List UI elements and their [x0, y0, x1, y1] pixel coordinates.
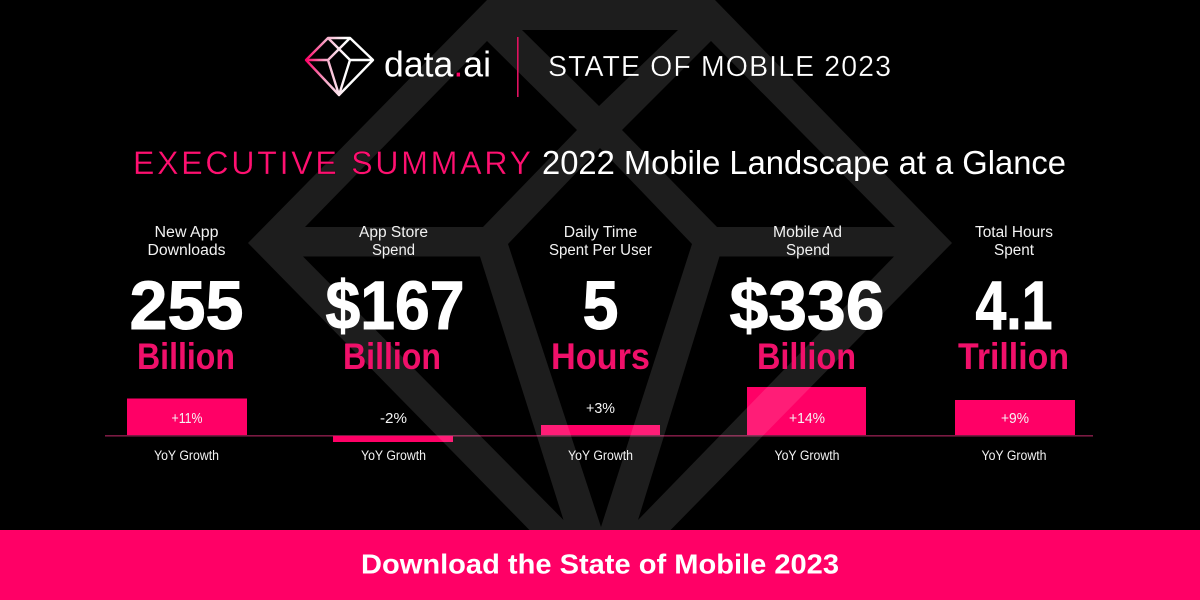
stat: new app downloads: YoY Growth	[154, 448, 219, 463]
background diamond watermark	[248, 0, 952, 600]
stat: new app downloads: +11%	[172, 410, 202, 427]
stat: new app downloads	[130, 224, 244, 463]
stat: daily time spent: Hours	[551, 336, 650, 377]
stat: total hours spent: Trillion	[958, 336, 1069, 377]
stat: mobile ad spend: $336	[730, 267, 884, 344]
call to action banner	[0, 530, 1200, 600]
stat: app store spend: App Store	[359, 224, 428, 241]
stat: total hours spent: +9%	[1001, 410, 1029, 427]
stat: new app downloads: New App	[154, 224, 218, 241]
stat: mobile ad spend: YoY Growth	[774, 448, 840, 463]
stat: app store spend: $167	[326, 267, 464, 344]
stat: daily time spent: +3%	[586, 400, 615, 417]
stat: app store spend: Billion	[343, 336, 441, 377]
stat: daily time spent: Spent Per User	[549, 242, 652, 259]
heading: EXECUTIVE SUMMARY	[133, 145, 531, 181]
stat: app store spend: -2%	[380, 410, 407, 427]
stat: mobile ad spend: Billion	[757, 336, 856, 377]
stat: daily time spent: YoY Growth	[568, 448, 633, 463]
divider	[517, 37, 519, 97]
call to action banner: Download the State of Mobile 2023	[361, 548, 839, 580]
stat: total hours spent: Total Hours	[975, 224, 1053, 241]
stat: new app downloads: Billion	[137, 336, 235, 377]
stat: daily time spent: Daily Time	[564, 224, 637, 241]
stat: daily time spent	[549, 224, 652, 463]
chart: YoY growth bars	[105, 387, 1093, 442]
stat: mobile ad spend: +14%	[789, 410, 825, 427]
report title: STATE OF MOBILE 2023	[548, 51, 891, 83]
stat: app store spend: Spend	[372, 242, 415, 259]
stat: mobile ad spend	[730, 224, 884, 463]
icon: diamond	[306, 38, 373, 95]
stat: total hours spent: YoY Growth	[982, 448, 1046, 463]
stat: total hours spent: Spent	[994, 242, 1035, 259]
stat: app store spend	[326, 224, 464, 463]
stat: total hours spent: 4.1	[976, 267, 1052, 344]
stat: daily time spent: 5	[582, 267, 618, 344]
heading	[133, 144, 1066, 181]
wordmark: data.ai	[384, 44, 491, 84]
stat: new app downloads: Downloads	[148, 242, 226, 259]
stat: mobile ad spend: Mobile Ad	[773, 224, 842, 241]
logo: data.ai	[306, 38, 491, 95]
heading: 2022 Mobile Landscape at a Glance	[542, 144, 1066, 181]
stat: total hours spent	[958, 224, 1069, 463]
stat: new app downloads: 255	[130, 267, 244, 344]
stat: mobile ad spend: Spend	[786, 242, 830, 259]
stat: app store spend: YoY Growth	[361, 448, 426, 463]
